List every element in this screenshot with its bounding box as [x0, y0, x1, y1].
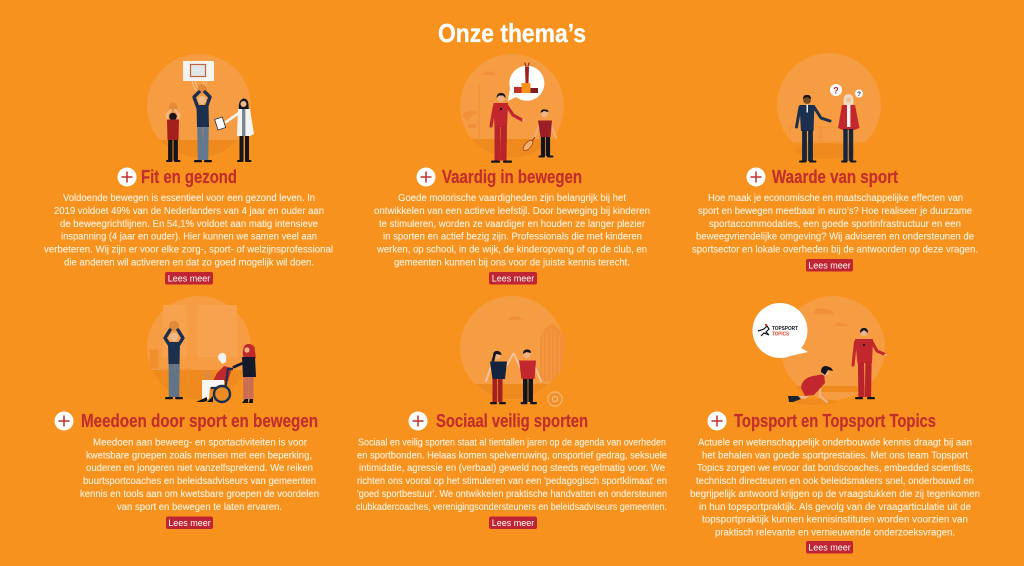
figure: child with racket — [521, 109, 556, 158]
figure: child with ball — [166, 103, 180, 162]
figure: doctor with clipboard — [215, 99, 254, 162]
text block: 'goed sportbestuur'. We ontwikkelen praktische handvatten en ondersteunen — [357, 489, 667, 500]
text block: Actuele en wetenschappelijk onderbouwde kennis draagt bij aan — [698, 438, 972, 448]
text block: kwetsbare groepen zoals mensen met een beperking, — [86, 450, 312, 461]
heading: Fit en gezond — [118, 167, 237, 187]
figure: man in suit — [796, 95, 830, 162]
text block: Voldoende bewegen is essentieel voor een gezond leven. In — [63, 193, 315, 204]
text block: clubkadercoaches, verenigingsondersteuners en beleidsadviseurs gemeenten. — [356, 502, 667, 513]
heading: Vaardig in bewegen: Vaardig in bewegen — [442, 167, 582, 187]
text block — [374, 193, 650, 268]
text block: die anderen wil activeren en dat zo goed mogelijk wil doen. — [64, 257, 314, 268]
text block: de beweegrichtlijnen. En 54,1% voldoet aan matig intensieve — [60, 219, 318, 230]
icon: question bubble small: ? — [857, 91, 861, 98]
figure: sprinter at start — [788, 366, 833, 402]
logo: Topsport Topics: TOPICS — [772, 332, 789, 338]
illustration: two people high five — [460, 296, 565, 406]
text block: van sport en bewegen te laten ervaren. — [117, 502, 282, 513]
figure: person in wheelchair — [196, 353, 233, 402]
figure: coach — [491, 93, 525, 163]
panel: Sociaal veilig sporten — [356, 296, 667, 529]
text block: verbeteren. Wij zijn er voor elke zorg-, sport- of welzijnsprofessional — [44, 244, 333, 256]
heading: Topsport en Topsport Topics: Topsport en Topsport Topics — [734, 411, 936, 431]
heading: Sociaal veilig sporten: Sociaal veilig sporten — [436, 411, 588, 431]
text block — [80, 438, 319, 513]
figure: man — [514, 349, 541, 404]
figure: woman in red jacket — [838, 94, 860, 162]
text block: intimidatie, agressie en (verbaal) geweld nog steeds regelmatig voor. We — [359, 463, 665, 474]
button: Lees meer: Lees meer — [168, 518, 211, 528]
text block: Goede motorische vaardigheden zijn belangrijk bij het — [398, 193, 626, 204]
panel: Fit en gezond — [44, 54, 333, 284]
text block: te stimuleren, worden ze vaardiger en houden ze langer plezier — [379, 219, 646, 230]
heading: Meedoen door sport en bewegen: Meedoen door sport en bewegen — [81, 411, 318, 431]
panel: Topsport en Topsport Topics — [690, 296, 980, 554]
figure: adult with ball — [194, 84, 212, 162]
text block: in sporten en actief bezig zijn. Professionals die met kinderen — [383, 232, 642, 242]
text block: beweegvriendelijke omgeving? Wij adviseren en ondersteunen de — [696, 232, 974, 242]
text block: sportsector en lokale overheden bij de antwoorden op deze vragen. — [692, 244, 978, 256]
text block — [692, 193, 978, 256]
title: Onze thema’s — [438, 18, 586, 48]
text block: ouderen en jongeren niet vanzelfsprekend. We reiken — [86, 463, 313, 474]
text block: 2019 voldoet 49% van de Nederlanders van 4 jaar en ouder aan — [54, 206, 324, 217]
text block: richten ons vooral op het stimuleren van een 'pedagogisch sportklimaat' en — [357, 476, 667, 487]
text block: inspanning (4 jaar en ouder). Hier kunnen we samen veel aan — [61, 232, 317, 242]
text block: buurtsportcoaches en beleidsadviseurs van gemeenten — [83, 476, 316, 487]
button: Lees meer: Lees meer — [808, 542, 851, 552]
illustration: coach and sprinter — [752, 296, 887, 405]
panel: Meedoen door sport en bewegen — [54, 296, 319, 529]
text block — [44, 193, 333, 268]
figure: woman — [486, 351, 513, 404]
speech bubble: Topsport Topics logo — [752, 303, 808, 358]
panel: Vaardig in bewegen — [374, 54, 650, 284]
text block: sportaccommodaties, een goede sportinfrastructuur en een — [709, 219, 961, 230]
button: Lees meer: Lees meer — [492, 518, 534, 528]
text block: en sportbonden. Helaas komen spelverruwing, onsportief gedrag, seksuele — [357, 450, 667, 461]
text block: Sociaal en veilig sporten staat al tientallen jaren op de agenda van overheden — [358, 438, 666, 448]
text block: in hun topsportpraktijk. Als gevolg van de vraagarticulatie uit de — [699, 502, 971, 513]
icon: ball — [548, 392, 562, 406]
text block: gemeenten kunnen bij ons voor de juiste kennis terecht. — [394, 257, 630, 268]
text block: topsportpraktijk kunnen kennisinstituten worden voorzien van — [702, 515, 968, 526]
heading: Fit en gezond: Fit en gezond — [141, 167, 237, 187]
text block: Hoe maak je economische en maatschappelijke effecten van — [708, 193, 963, 204]
text block: praktisch relevante en vernieuwende onderzoeksvragen. — [715, 528, 955, 538]
text block: begrijpelijk antwoord krijgen op de vraagstukken die zij tegenkomen — [690, 489, 980, 500]
icon: question bubble large: ? — [833, 86, 839, 96]
button: Lees meer: Lees meer — [808, 260, 851, 270]
figure: woman with headscarf — [234, 344, 256, 403]
panel: Waarde van sport — [692, 53, 978, 272]
text block: kennis en tools aan om kwetsbare groepen de voordelen — [80, 489, 319, 500]
illustration: coach and child — [460, 54, 564, 163]
text block: Topics zorgen we ervoor dat bondscoaches, embedded scientists, — [697, 463, 973, 474]
text block: sport en bewegen meetbaar in euro’s? Hoe realiseer je duurzame — [698, 206, 972, 217]
text block: Meedoen aan beweeg- en sportactiviteiten is voor — [93, 438, 308, 448]
speech bubble: podium — [508, 63, 544, 101]
logo: Topsport Topics — [758, 324, 799, 338]
illustration: basketball scene — [147, 54, 254, 162]
text block: werken, op school, in de wijk, de kinderopvang of op de club, en — [376, 244, 647, 256]
heading: Waarde van sport: Waarde van sport — [772, 167, 898, 187]
figure: coach — [853, 328, 887, 399]
text block: ontwikkelen van een actieve leefstijl. Door beweging bij kinderen — [374, 206, 650, 217]
button: Lees meer: Lees meer — [492, 274, 534, 284]
figure: adult with ball — [165, 321, 183, 399]
text block: technisch directeuren en ook beleidsmakers snel, onderbouwd en — [696, 476, 974, 487]
text block — [690, 438, 980, 538]
illustration: wheelchair scene — [147, 296, 256, 403]
text block — [356, 438, 667, 513]
button: Lees meer: Lees meer — [168, 274, 210, 284]
illustration: two people with questions — [777, 53, 881, 163]
text block: het behalen van goede sportprestaties. Met ons team Topsport — [702, 450, 968, 461]
logo: Topsport Topics: TOPSPORT — [772, 326, 799, 332]
